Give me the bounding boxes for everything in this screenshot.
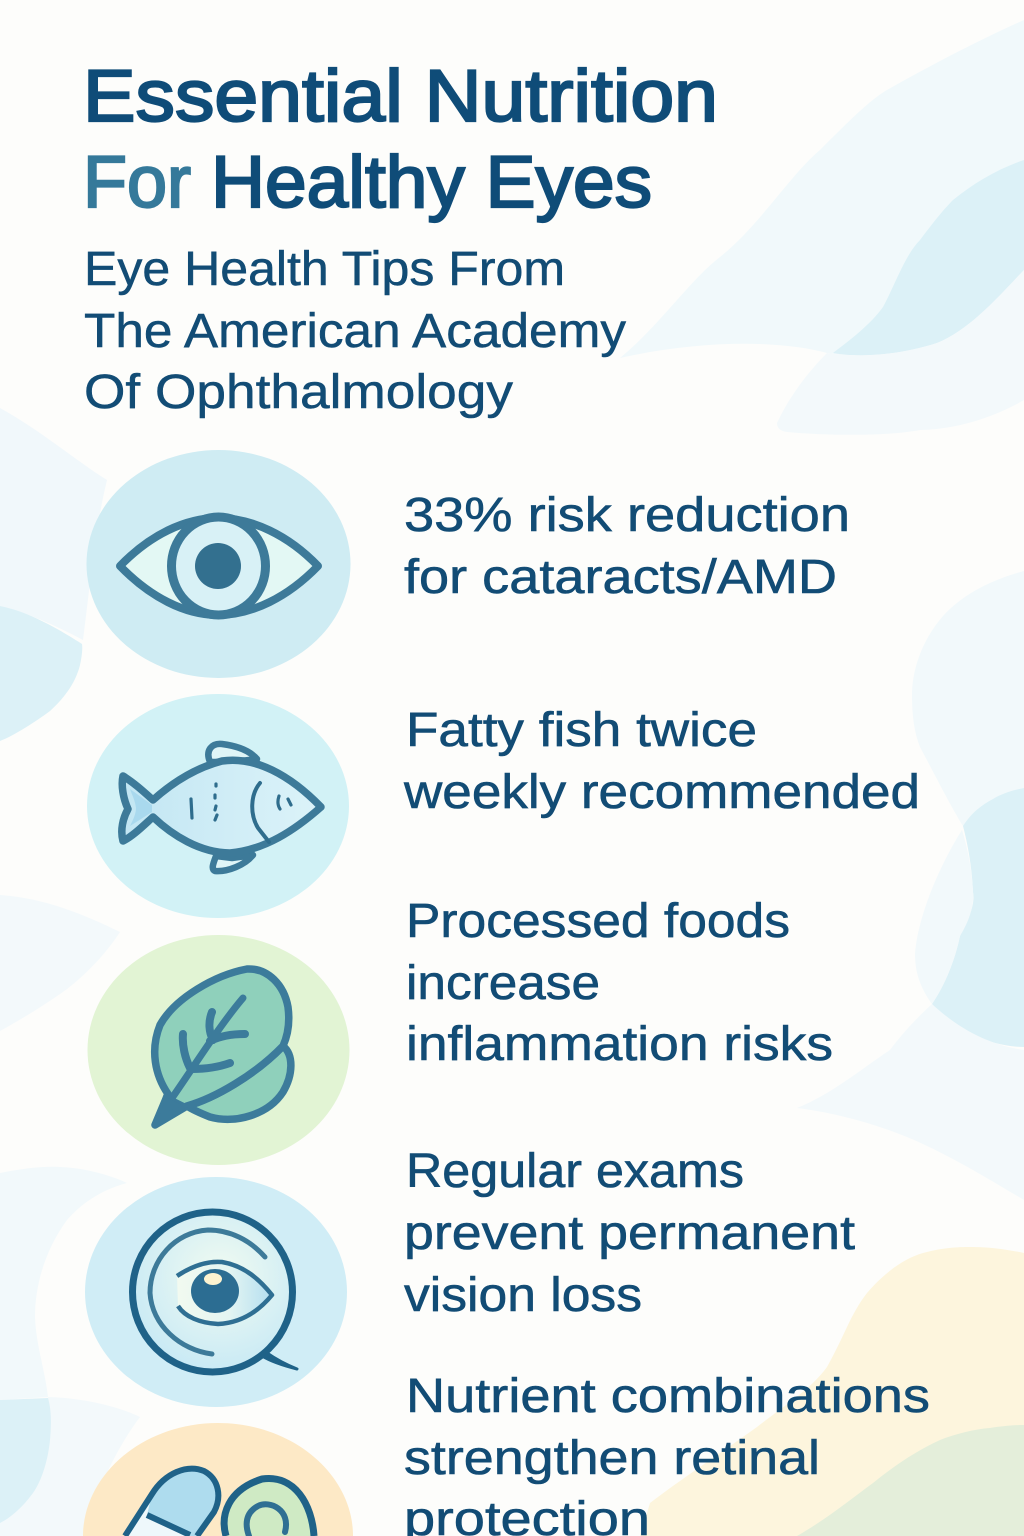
benefit text: Processed foods (406, 895, 790, 948)
icon: eye in magnifier (85, 1177, 347, 1407)
panel: regular exams (85, 1145, 855, 1407)
benefit text: vision loss (404, 1269, 642, 1322)
title: Essential Nutrition (83, 56, 718, 137)
subtitle: Eye Health Tips From (84, 243, 565, 296)
benefit text: increase (406, 957, 600, 1010)
benefit text: inflammation risks (406, 1018, 833, 1071)
benefit text: strengthen retinal (404, 1432, 820, 1485)
icon: leaf (88, 935, 350, 1165)
icon: capsule and supplement (83, 1423, 353, 1536)
benefit text: for cataracts/AMD (404, 551, 837, 604)
panel: fatty fish (87, 694, 920, 918)
subtitle (84, 243, 626, 419)
panel: processed foods (88, 895, 833, 1165)
panel: nutrient combinations (83, 1370, 930, 1536)
benefit text (404, 489, 850, 604)
icon: fish (87, 694, 349, 918)
subtitle: Of Ophthalmology (84, 366, 513, 419)
panel: cataract and AMD risk (86, 450, 850, 678)
benefit text (403, 704, 920, 819)
icon: eye (86, 450, 350, 678)
benefit text: prevent permanent (404, 1207, 855, 1260)
benefit text: Fatty fish twice (406, 704, 757, 757)
title (83, 56, 718, 223)
subtitle: The American Academy (84, 305, 626, 358)
benefit text: 33% risk reduction (404, 489, 850, 542)
benefit text (404, 1370, 930, 1536)
benefit text: Nutrient combinations (406, 1370, 930, 1423)
benefit text (406, 895, 833, 1071)
benefit text (404, 1145, 855, 1322)
title: For (83, 142, 191, 223)
benefit text: Regular exams (406, 1145, 744, 1198)
title: Healthy Eyes (211, 142, 652, 223)
benefit text: weekly recommended (403, 766, 920, 819)
